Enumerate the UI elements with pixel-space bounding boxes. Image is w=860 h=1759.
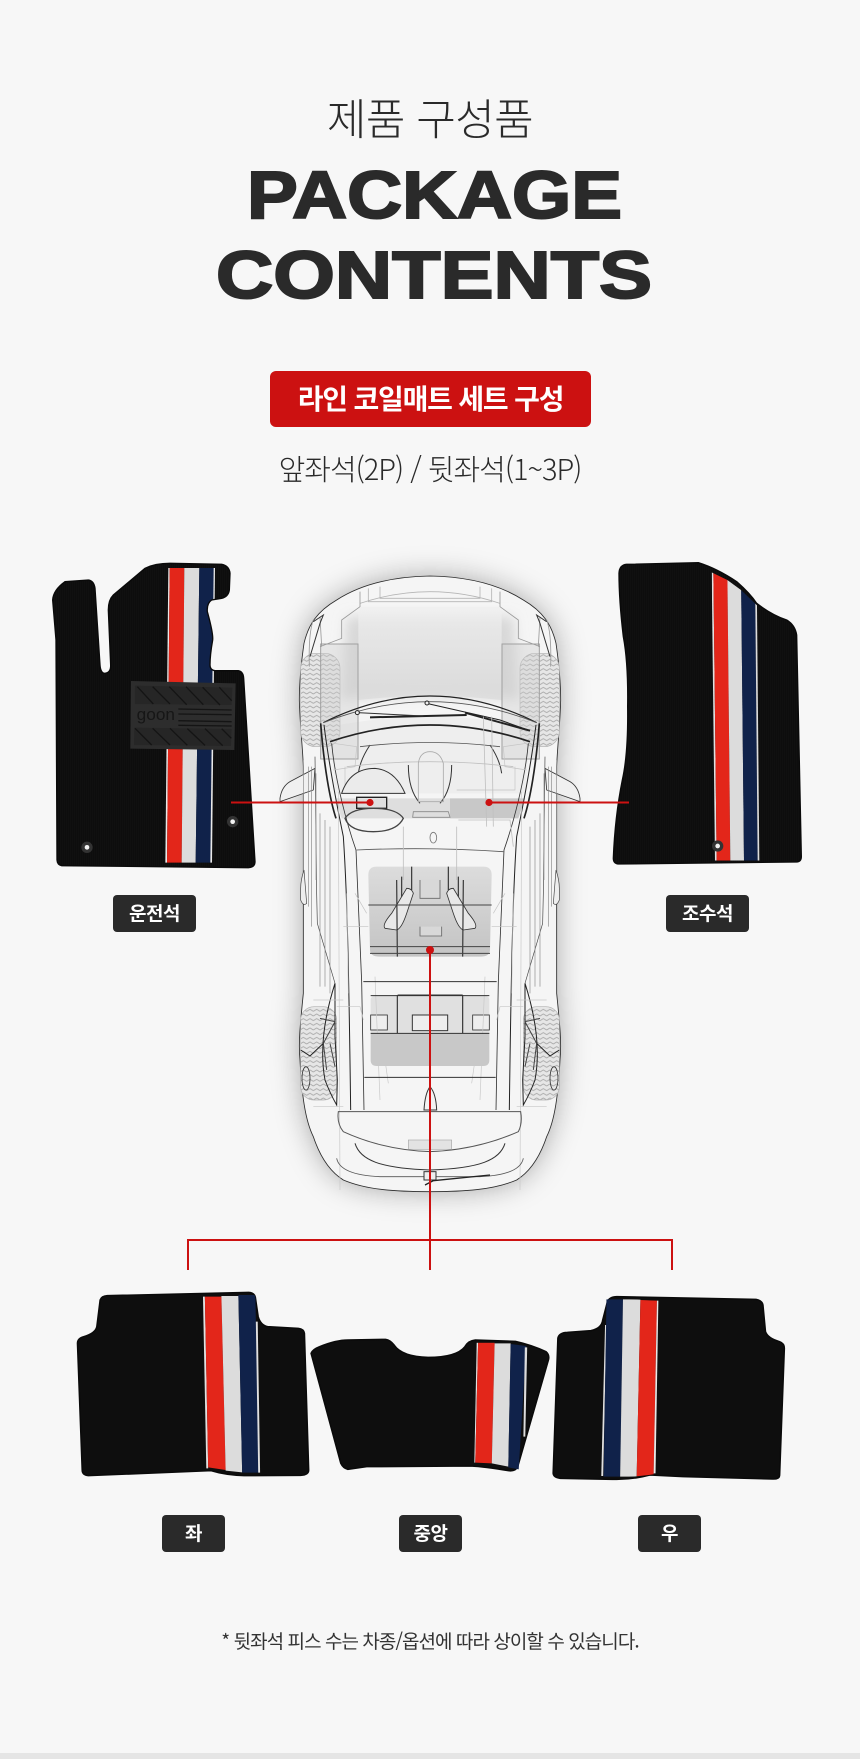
heading: PACKAGE CONTENTS: PACKAGE [247,158,622,233]
label: passenger seat [666,895,749,932]
footnote: * 뒷좌석 피스 수는 차종/옵션에 따라 상이할 수 있습니다. [221,1627,639,1654]
mat: rear left [77,1292,309,1476]
label: center [399,1515,462,1552]
interior: steering wheel, console, seats [342,752,497,1110]
illustration: mats and car [52,560,802,1480]
label: driver seat [113,895,196,932]
connector: passenger seat line [485,799,629,806]
label: driver seat: 운전석 [129,899,180,926]
mat: driver seat [53,563,255,868]
mat: rear right [553,1297,784,1479]
label: right [638,1515,701,1552]
label: left [162,1515,225,1552]
windshield and wipers [323,696,537,880]
heading: PACKAGE CONTENTS [216,158,652,313]
car hood and glass panels [330,587,530,1066]
heel pad: goon [137,705,175,724]
mat: passenger seat [613,563,801,864]
label: passenger seat: 조수석 [682,899,733,926]
label: right: 우 [661,1519,678,1546]
label: center: 중앙 [414,1519,447,1546]
car illustration [280,576,580,1192]
heading: Korean title: 제품 구성품 [327,86,533,148]
badge: set composition: 라인 코일매트 세트 구성 [298,378,563,418]
label: left: 좌 [185,1519,202,1546]
grommets [81,816,238,853]
connector: driver seat line [231,799,374,806]
subtitle: seat pieces: 앞좌석(2P) / 뒷좌석(1~3P) [279,447,581,489]
trunk and rear bumper [337,1112,523,1185]
connector: rear seat bracket [188,947,672,1270]
car left and right halves [280,592,580,1190]
mat: rear center [311,1339,549,1471]
bottom strip [0,1753,860,1759]
badge: set composition [270,371,591,427]
heel pad [130,681,236,750]
heading: PACKAGE CONTENTS: CONTENTS [216,238,652,313]
